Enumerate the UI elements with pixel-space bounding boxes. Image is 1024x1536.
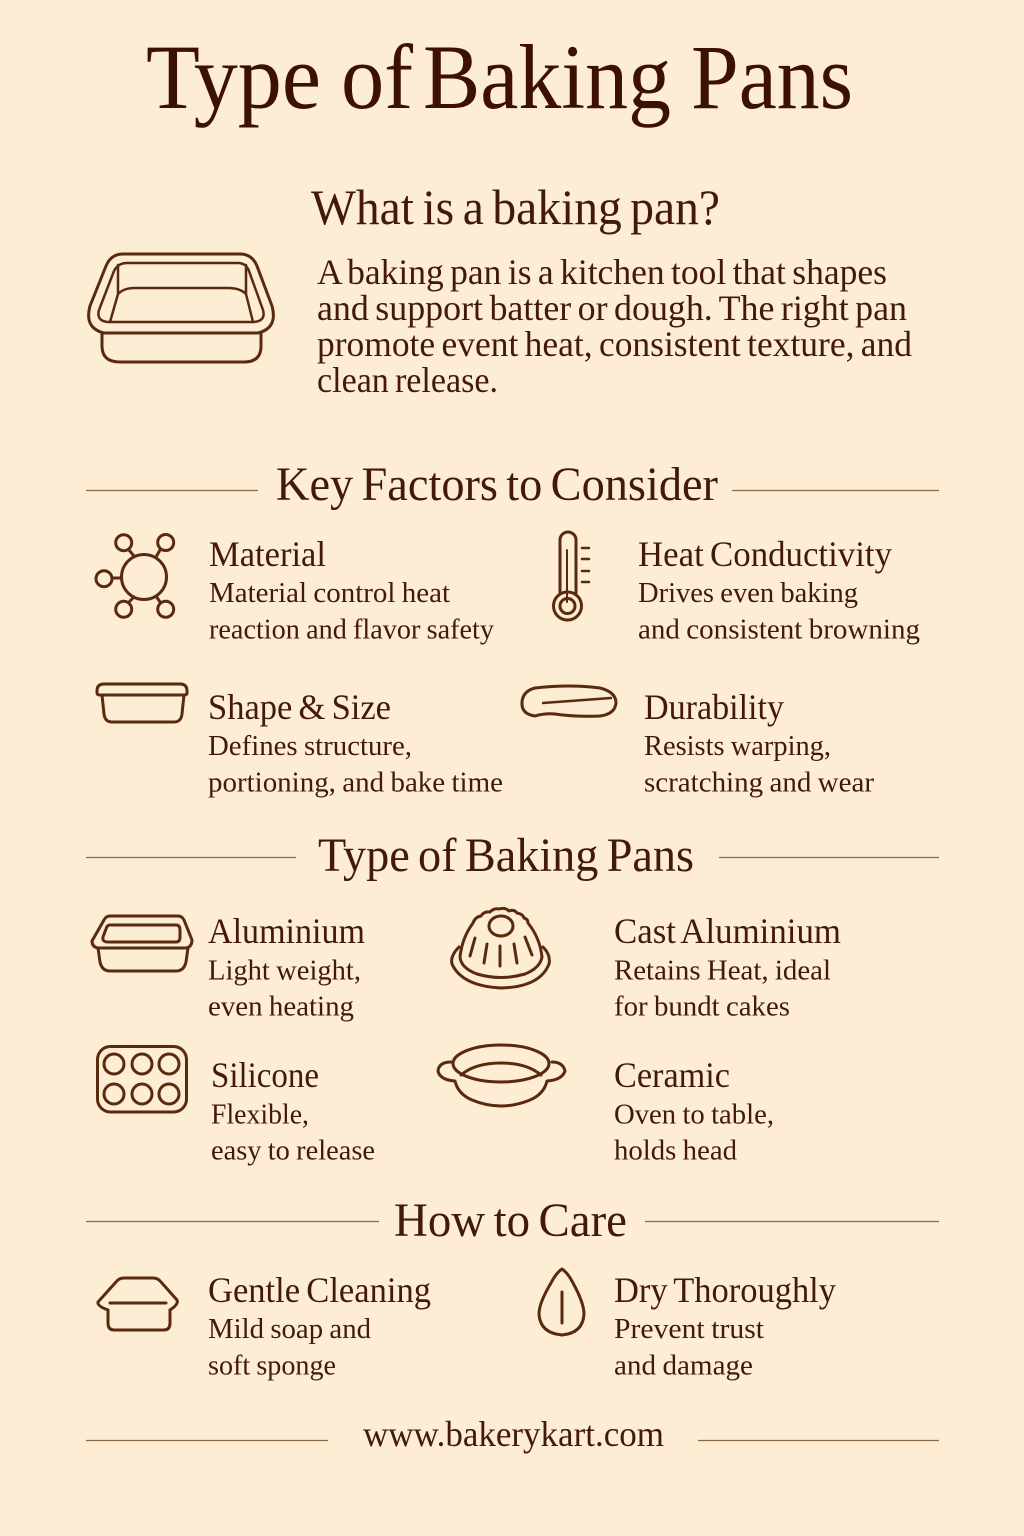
title: Type — [146, 26, 321, 128]
type: silicone: easy to release — [211, 1134, 375, 1166]
factor: durability: Durability — [644, 687, 784, 727]
type: aluminium: Aluminium — [208, 911, 365, 951]
panel: types of baking pans — [92, 829, 841, 1166]
type: aluminium: Light weight, — [208, 954, 361, 986]
factor: durability: Resists warping, — [644, 730, 831, 762]
type: ceramic: holds head — [614, 1134, 737, 1166]
icon: aluminium loaf pan — [92, 916, 192, 971]
care: gentle cleaning: soft sponge — [208, 1350, 336, 1382]
care: dry thoroughly: Dry Thoroughly — [614, 1270, 836, 1310]
type: silicone — [98, 1046, 375, 1166]
icon: warped pan — [522, 686, 616, 716]
type: cast aluminium — [452, 908, 841, 1022]
factor: shape and size: portioning, and bake time — [208, 766, 503, 798]
icon: water drop — [539, 1269, 584, 1335]
factor: heat conductivity: and consistent browning — [638, 614, 920, 646]
factor: shape and size: Shape & Size — [208, 687, 391, 727]
icon: square baking pan — [89, 254, 273, 362]
panel: how to care — [98, 1194, 836, 1382]
heading: what is a baking pan: What is a baking pan? — [311, 179, 720, 235]
factor: material — [96, 534, 494, 646]
footer: website: www.bakerykart.com — [363, 1414, 664, 1454]
icon: rectangular pan — [97, 684, 187, 722]
care: dry thoroughly — [539, 1269, 836, 1382]
panel: key factors to consider — [96, 458, 920, 798]
care: gentle cleaning: Mild soap and — [208, 1313, 371, 1345]
type: ceramic: Oven to table, — [614, 1098, 774, 1130]
icon: bundt pan — [452, 908, 549, 988]
type: silicone: Flexible, — [211, 1098, 309, 1130]
factor: shape and size — [97, 684, 503, 798]
care: gentle cleaning: Gentle Cleaning — [208, 1270, 431, 1310]
factor: durability — [522, 686, 874, 798]
factor: durability: scratching and wear — [644, 766, 874, 798]
factor: heat conductivity — [554, 532, 920, 646]
title: Pans — [691, 26, 853, 128]
heading: type of baking pans: Type of Baking Pans — [318, 829, 694, 882]
type: cast aluminium: Retains Heat, ideal — [614, 954, 831, 986]
factor: shape and size: Defines structure, — [208, 730, 412, 762]
care: gentle cleaning — [98, 1270, 431, 1382]
factor: heat conductivity: Heat Conductivity — [638, 534, 892, 574]
icon: muffin tray — [98, 1046, 186, 1112]
icon: covered pan — [98, 1278, 177, 1330]
type: aluminium: even heating — [208, 990, 354, 1022]
title: Baking — [423, 26, 671, 128]
title: of — [341, 26, 413, 128]
type: cast aluminium: for bundt cakes — [614, 990, 790, 1022]
text block: baking pan definition: promote event heat, consistent texture, and — [317, 324, 912, 364]
type: cast aluminium: Cast Aluminium — [614, 911, 841, 951]
icon: ceramic dish — [438, 1045, 565, 1106]
care: dry thoroughly: and damage — [614, 1350, 753, 1382]
factor: heat conductivity: Drives even baking — [638, 577, 858, 609]
factor: material: Material control heat — [209, 577, 450, 609]
icon: material molecule — [96, 534, 174, 617]
text block: baking pan definition — [317, 252, 912, 400]
panel: what is a baking pan — [89, 179, 912, 400]
type: ceramic: Ceramic — [614, 1055, 730, 1095]
text block: baking pan definition: A baking pan is a kitchen tool that shapes — [317, 252, 887, 292]
title — [146, 26, 853, 128]
factor: material: Material — [209, 534, 326, 574]
type: silicone: Silicone — [211, 1055, 319, 1095]
icon: thermometer — [554, 532, 589, 620]
text block: baking pan definition: and support batter or dough. The right pan — [317, 288, 907, 328]
heading: key factors: Key Factors to Consider — [276, 458, 718, 511]
care: dry thoroughly: Prevent trust — [614, 1313, 764, 1345]
type: aluminium — [92, 911, 365, 1022]
heading: how to care: How to Care — [394, 1194, 627, 1247]
factor: material: reaction and flavor safety — [209, 614, 494, 646]
text block: baking pan definition: clean release. — [317, 360, 498, 400]
type: ceramic — [438, 1045, 774, 1166]
